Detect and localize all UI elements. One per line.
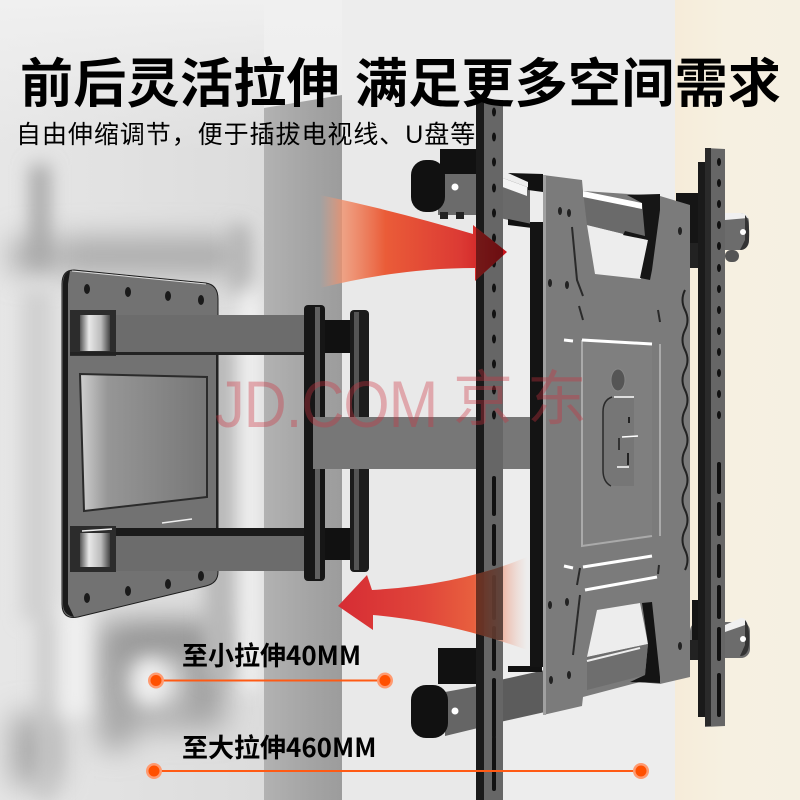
title: 前后灵活拉伸 满足更多空间需求 (20, 55, 781, 114)
keyhole mount (603, 369, 638, 486)
embossed panel (582, 340, 660, 546)
measure line: minimum stretch (148, 672, 393, 688)
right vertical TV strap (698, 148, 725, 727)
measure line: maximum stretch (146, 763, 649, 779)
TV plate top rail with knobs (411, 149, 749, 268)
bottom crossbar seen through plate (630, 602, 660, 683)
arm pivot brackets (304, 305, 369, 581)
subtitle: 自由伸缩调节，便于插拔电视线、U盘等 (16, 121, 476, 149)
watermark: 京东 (453, 366, 601, 433)
upper swing arm (70, 315, 316, 532)
highlights (564, 340, 657, 590)
arrow: pointing right (extend out) (320, 195, 507, 288)
maximum stretch measure (146, 728, 649, 779)
left vertical TV strap (476, 100, 503, 800)
main TV mounting plate (530, 175, 690, 715)
TV plate bottom rail with knobs (411, 600, 750, 738)
label: maximum stretch: 至大拉伸460MM (182, 728, 376, 765)
label: minimum stretch: 至小拉伸40MM (182, 636, 361, 673)
watermark (215, 366, 601, 441)
arrow: pointing left (push in) (338, 557, 527, 650)
top crossbar seen through plate (583, 191, 648, 240)
minimum stretch measure (148, 636, 393, 688)
lower swing arm (82, 519, 311, 571)
watermark: JD.COM (215, 367, 437, 441)
horizontal cross arm (313, 417, 538, 469)
wall plate (62, 270, 218, 617)
